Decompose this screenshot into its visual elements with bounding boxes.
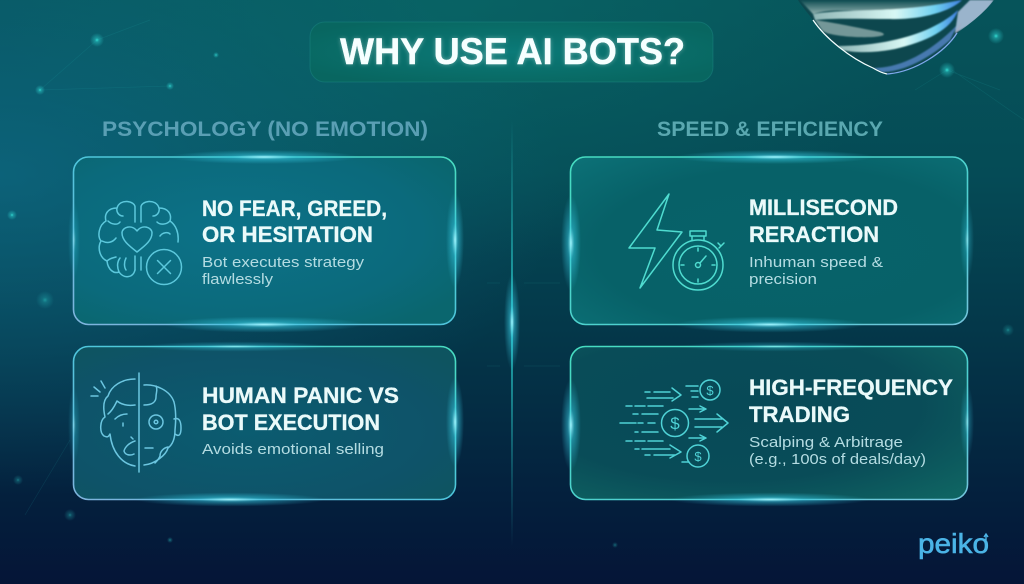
title pill	[310, 22, 713, 82]
icon: lightning and stopwatch	[629, 194, 724, 290]
title: WHY USE AI BOTS?	[340, 31, 685, 72]
panel: human panic vs bot execution	[68, 342, 464, 506]
title pill: WHY USE AI BOTS?	[340, 31, 685, 72]
card heading line 2: BOT EXECUTION	[202, 410, 380, 435]
center divider	[504, 120, 520, 547]
icon: flying coins and arrows: $	[706, 383, 714, 398]
panel: millisecond reaction	[561, 150, 974, 332]
icon: flying coins and arrows: $	[694, 449, 702, 464]
panel: no fear, greed, or hesitation	[68, 150, 464, 332]
card heading line 2: RERACTION	[749, 222, 879, 247]
card description: Bot executes strategy	[202, 254, 365, 271]
card description line 2: precision	[749, 271, 817, 288]
icon: half human half robot face	[91, 373, 181, 472]
card description: Avoids emotional selling	[202, 441, 384, 458]
card description line 2: (e.g., 100s of deals/day)	[749, 451, 926, 468]
card description: Scalping & Arbitrage	[749, 434, 903, 451]
card heading line 2: OR HESITATION	[202, 222, 373, 247]
card heading: NO FEAR, GREED,	[202, 196, 387, 221]
card heading line 2: TRADING	[749, 402, 850, 427]
heading: psychology: PSYCHOLOGY (NO EMOTION)	[102, 118, 428, 141]
card heading: HIGH-FREQUENCY	[749, 375, 953, 400]
card description: Inhuman speed &	[749, 254, 883, 271]
heading: speed and efficiency: SPEED & EFFICIENCY	[657, 118, 883, 141]
icon: flying coins and arrows	[620, 380, 728, 467]
icon: brain with heart and cross	[99, 201, 182, 284]
card heading: HUMAN PANIC VS	[202, 383, 399, 408]
icon: flying coins and arrows: $	[670, 414, 680, 433]
panel: high-frequency trading	[561, 342, 974, 506]
logo: peiko: peiko	[918, 528, 989, 559]
card heading: MILLISECOND	[749, 195, 898, 220]
decorative glass shape	[795, 0, 995, 76]
card description line 2: flawlessly	[202, 271, 274, 288]
